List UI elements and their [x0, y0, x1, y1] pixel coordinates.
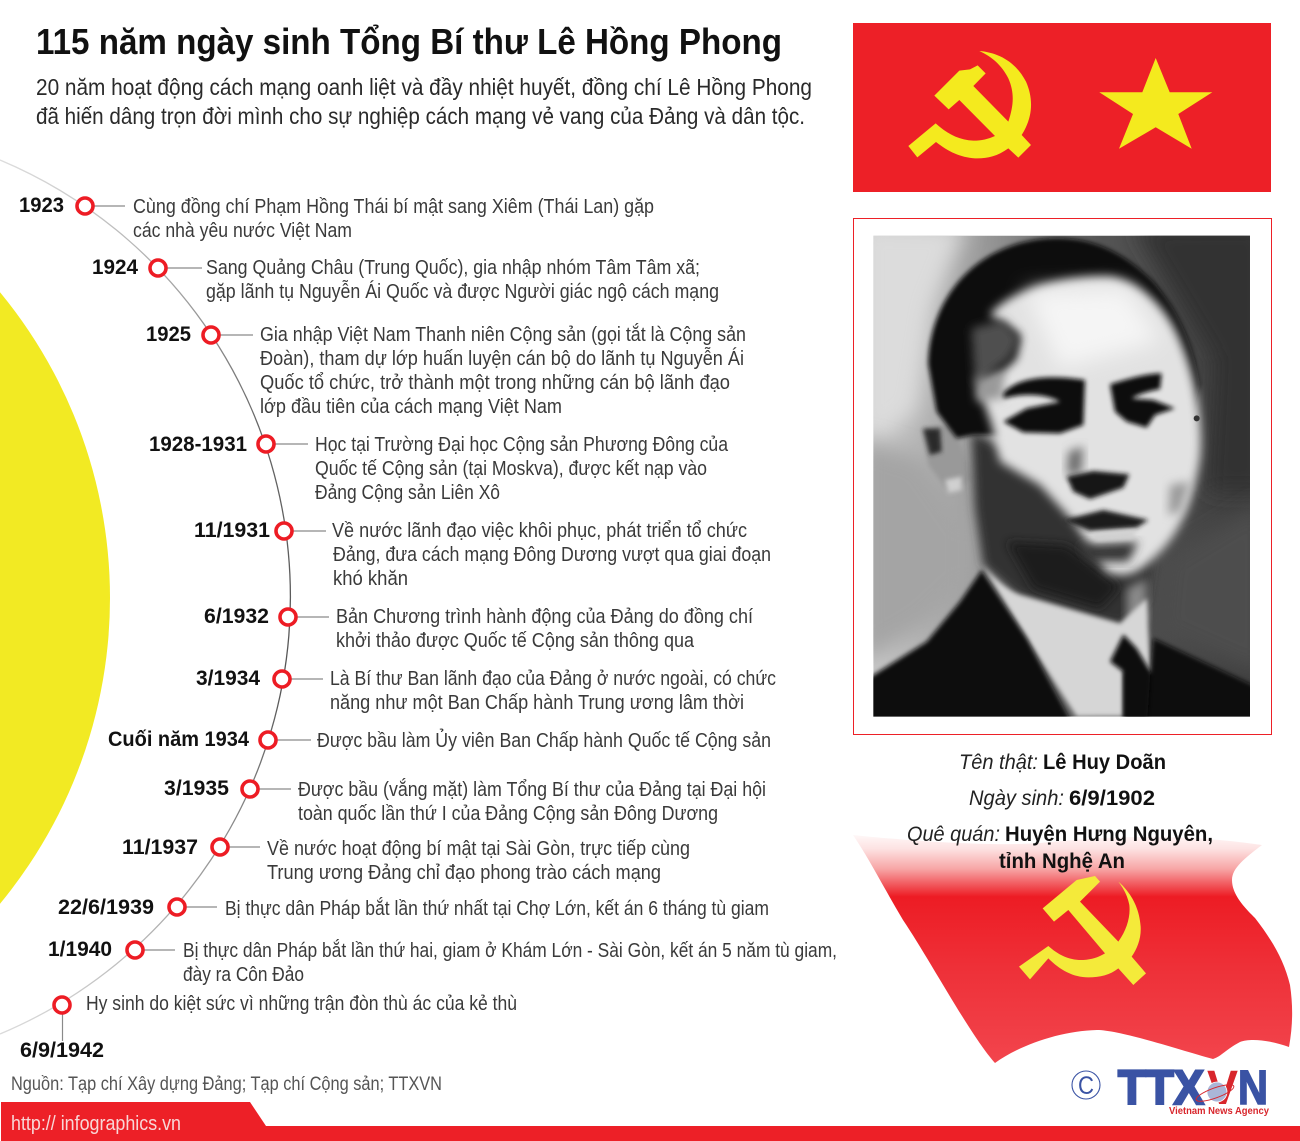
entry: 1928-1931: Đảng Cộng sản Liên Xô: [315, 482, 500, 504]
entry: Cuối năm 1934: Cuối năm 1934: [108, 728, 249, 751]
party flag with star: [853, 23, 1271, 192]
TTXVN logo: [1072, 1062, 1269, 1117]
entry: 3/1934: năng như một Ban Chấp hành Trung ương lâm thời: [330, 692, 744, 714]
entry: 6/9/1942: Hy sinh do kiệt sức vì những trận đòn thù ác của kẻ thù: [86, 993, 517, 1015]
icon: star: [1099, 58, 1212, 149]
entry: 3/1935: [164, 777, 766, 825]
entry: 11/1937: 11/1937: [122, 836, 198, 859]
entry: 1/1940: Bị thực dân Pháp bắt lần thứ hai, giam ở Khám Lớn - Sài Gòn, kết án 5 năm tù giam,: [183, 939, 837, 962]
timeline arc: [0, 160, 290, 1034]
entry: 1924: Sang Quảng Châu (Trung Quốc), gia nhập nhóm Tâm Tâm xã;: [206, 257, 700, 279]
tie: [1110, 634, 1151, 732]
entry: 22/6/1939: Bị thực dân Pháp bắt lần thứ nhất tại Chợ Lớn, kết án 6 tháng tù giam: [225, 897, 769, 920]
TTXVN logo: Vietnam News Agency: [1169, 1105, 1269, 1117]
entry: 11/1931: khó khăn: [333, 568, 408, 590]
entry: 1/1940: [48, 938, 837, 986]
icon: hammer and sickle on flag: [1019, 876, 1146, 985]
entry: 1925: Quốc tổ chức, trở thành một trong những cán bộ lãnh đạo: [260, 372, 730, 394]
portrait caption: Tên thật:: [959, 751, 1038, 774]
portrait caption: Lê Huy Doãn: [1043, 751, 1166, 774]
entry: 3/1935: 3/1935: [164, 777, 229, 800]
entry: Cuối năm 1934: Được bầu làm Ủy viên Ban Chấp hành Quốc tế Cộng sản: [317, 728, 771, 752]
entry: 3/1934: Là Bí thư Ban lãnh đạo của Đảng ở nước ngoài, có chức: [330, 668, 776, 690]
yellow background circle: [0, 118, 110, 1078]
nose: [1067, 447, 1083, 475]
entry: 6/1932: [204, 605, 753, 652]
ear: [922, 426, 966, 484]
entry: 1923: Cùng đồng chí Phạm Hồng Thái bí mật sang Xiêm (Thái Lan) gặp: [133, 196, 654, 218]
icon: copyright: [1072, 1071, 1100, 1100]
jacket: [873, 568, 1072, 717]
right cheek shade: [1168, 482, 1190, 515]
entry: 11/1931: 11/1931: [194, 519, 270, 542]
portrait caption: Ngày sinh:: [969, 787, 1064, 810]
entry: 1/1940: đày ra Côn Đảo: [183, 964, 304, 986]
entry: 6/1932: 6/1932: [204, 605, 269, 628]
entry: 1924: 1924: [92, 256, 138, 279]
entry: 22/6/1939: [58, 896, 769, 920]
entry: 3/1935: Được bầu (vắng mặt) làm Tổng Bí thư của Đảng tại Đại hội: [298, 778, 766, 801]
entry: 11/1937: Về nước hoạt động bí mật tại Sài Gòn, trực tiếp cùng: [267, 838, 690, 860]
title: 115 năm ngày sinh Tổng Bí thư Lê Hồng Phong: [36, 21, 782, 62]
entry: 11/1931: [194, 519, 771, 590]
entry: 1923: các nhà yêu nước Việt Nam: [133, 220, 352, 242]
entry: 6/1932: khởi thảo được Quốc tế Cộng sản thông qua: [336, 630, 695, 652]
entry: 1925: [146, 323, 746, 418]
entry: 1924: gặp lãnh tụ Nguyễn Ái Quốc và được Người giác ngộ cách mạng: [206, 280, 719, 303]
subtitle: đã hiến dâng trọn đời mình cho sự nghiệp cách mạng vẻ vang của Đảng và dân tộc.: [36, 103, 805, 129]
entry: 6/1932: Bản Chương trình hành động của Đảng do đồng chí: [336, 606, 753, 628]
entry: 1928-1931: [149, 433, 729, 504]
entry: 6/9/1942: 6/9/1942: [20, 1039, 104, 1062]
entry: 1923: 1923: [19, 194, 64, 217]
TTXVN logo: V: [1207, 1062, 1238, 1115]
footer bar: [1, 1102, 1300, 1141]
icon: copyright: C: [1078, 1072, 1094, 1100]
entry: 3/1935: toàn quốc lần thứ I của Đảng Cộng sản Đông Dương: [298, 803, 718, 825]
entry: 11/1937: Trung ương Đảng chỉ đạo phong trào cách mạng: [267, 862, 661, 884]
face: [980, 277, 1201, 575]
source note: Nguồn: Tạp chí Xây dựng Đảng; Tạp chí Cộng sản; TTXVN: [11, 1074, 442, 1095]
portrait caption: Huyện Hưng Nguyên,: [1005, 823, 1213, 846]
collar: [983, 565, 1151, 717]
entry: 1928-1931: Quốc tế Cộng sản (tại Moskva), được kết nạp vào: [315, 458, 707, 480]
entry: 11/1931: Về nước lãnh đạo việc khôi phục, phát triển tổ chức: [332, 520, 747, 542]
icon: globe: [1194, 1081, 1236, 1105]
entry: 22/6/1939: 22/6/1939: [58, 896, 154, 919]
entry: 11/1931: Đảng, đưa cách mạng Đông Dương vượt qua giai đoạn: [333, 544, 771, 566]
mouth: [1063, 510, 1148, 531]
icon: hammer and sickle: [908, 51, 1031, 158]
entry: 3/1934: 3/1934: [196, 667, 260, 690]
entry: 1924: [92, 256, 719, 303]
hair: [928, 238, 1200, 438]
entry: 1925: Gia nhập Việt Nam Thanh niên Cộng sản (gọi tắt là Cộng sản: [260, 323, 746, 346]
entry: 1928-1931: 1928-1931: [149, 433, 247, 456]
TTXVN logo: N: [1238, 1062, 1268, 1115]
timeline: [0, 160, 837, 1062]
portrait caption: [907, 751, 1213, 873]
waving party flag: [853, 835, 1292, 1063]
portrait caption: tỉnh Nghệ An: [999, 850, 1125, 873]
portrait frame: [854, 218, 1272, 734]
entry: 1928-1931: Học tại Trường Đại học Cộng sản Phương Đông của: [315, 434, 729, 456]
subtitle: [36, 74, 812, 129]
portrait caption: Quê quán:: [907, 823, 1000, 846]
TTXVN logo: TTX: [1118, 1062, 1204, 1115]
footer url: http:// infographics.vn: [11, 1113, 181, 1135]
entry: Cuối năm 1934: [108, 728, 771, 752]
temple shadow: [972, 320, 1020, 385]
entry: 6/9/1942: [20, 993, 517, 1062]
portrait photo: [873, 236, 1250, 717]
entry: 1923: [19, 194, 654, 242]
entry: 11/1937: [122, 836, 690, 884]
entry: 1925: 1925: [146, 323, 191, 346]
entry: 3/1934: [196, 667, 776, 714]
portrait caption: 6/9/1902: [1069, 787, 1155, 810]
subtitle: 20 năm hoạt động cách mạng oanh liệt và đầy nhiệt huyết, đồng chí Lê Hồng Phong: [36, 74, 812, 100]
eyebrows and eyes: [1003, 377, 1085, 433]
entry: 1925: lớp đầu tiên của cách mạng Việt Nam: [260, 396, 562, 418]
entry: 1925: Đoàn), tham dự lớp huấn luyện cán bộ do lãnh tụ Nguyễn Ái: [260, 347, 744, 370]
neck and jaw shadow: [972, 432, 1153, 625]
entry: 1/1940: 1/1940: [48, 938, 112, 961]
